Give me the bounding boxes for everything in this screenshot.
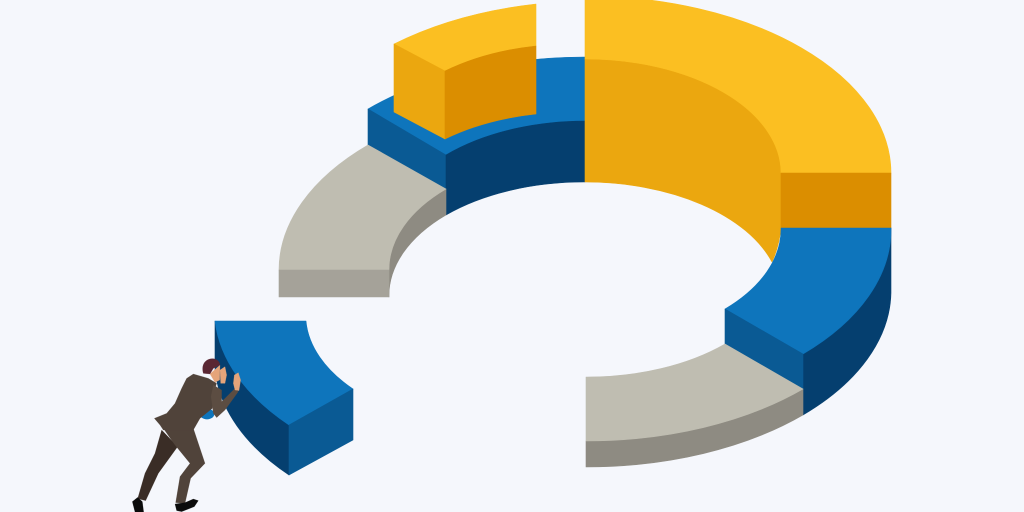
near hand — [233, 373, 241, 391]
segment: large yellow ring — [585, 0, 891, 262]
jacket — [154, 374, 217, 430]
figure: man in suit pushing the piece — [132, 359, 241, 512]
segment: lower right blue ring — [725, 228, 891, 415]
sleeve — [211, 385, 238, 418]
front shoe — [175, 499, 198, 512]
front leg — [163, 428, 205, 503]
far hand — [220, 367, 227, 383]
segment: left grey ring — [279, 145, 446, 297]
segment: upper blue ring — [368, 57, 585, 215]
segment: bottom grey ring — [586, 344, 803, 467]
segment: raised small yellow block — [394, 4, 536, 139]
back leg — [138, 430, 178, 501]
segment: detached blue piece — [215, 321, 353, 475]
back shoe — [132, 497, 144, 512]
hair — [203, 359, 220, 374]
blue spot under arm — [200, 409, 214, 419]
neck and face — [210, 365, 220, 382]
